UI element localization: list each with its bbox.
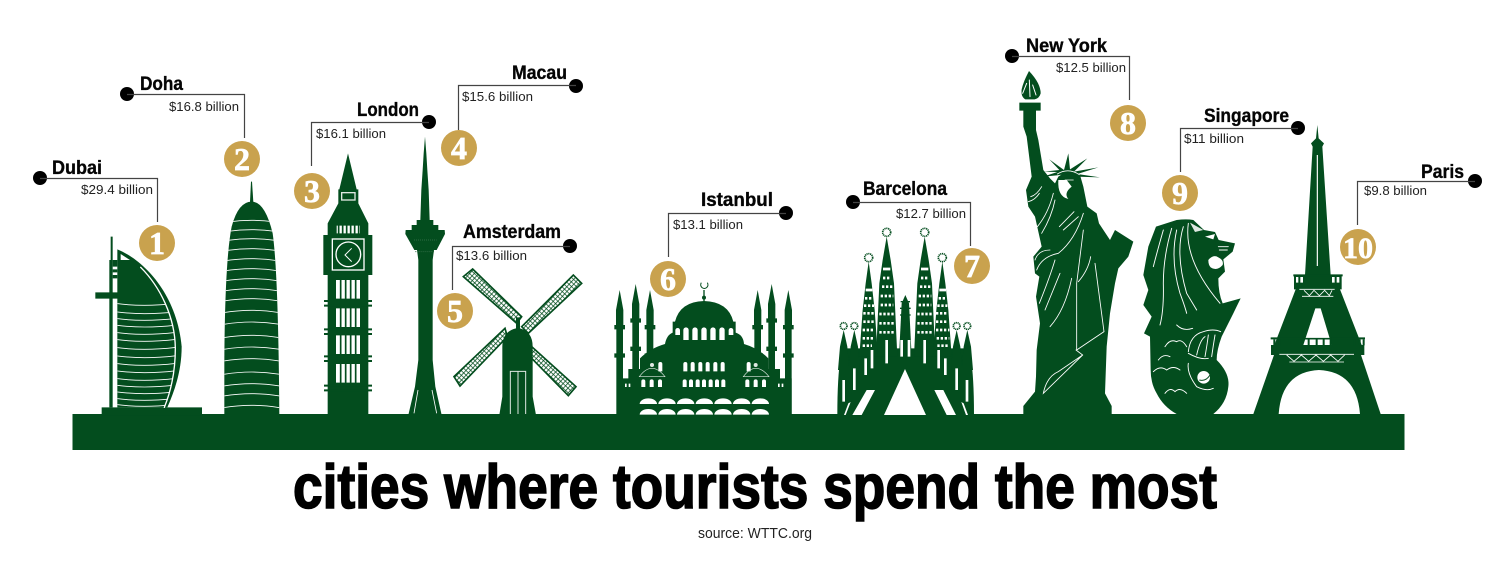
- callout: 10 Paris: [1340, 162, 1482, 265]
- callout: 5 Amsterdam: Amsterdam: [463, 222, 561, 243]
- callout: 2 Doha: $16.8 billion: [169, 99, 239, 114]
- landmark: Big Ben, London: [323, 153, 372, 415]
- callout: 4 Macau: Macau: [512, 63, 567, 84]
- callout: 4 Macau: $15.6 billion: [462, 89, 533, 104]
- landmark: Sagrada Familia, Barcelona: [837, 228, 974, 415]
- callout: 4 Macau: 4: [451, 130, 467, 166]
- callout: 7 Barcelona: 7: [964, 248, 980, 284]
- callout: 2 Doha: Doha: [140, 74, 183, 95]
- landmark: mosque, Istanbul: [614, 283, 794, 415]
- title: cities where tourists spend the most: [293, 453, 1217, 522]
- callout: 1 Dubai: 1: [149, 225, 165, 261]
- callout: 6 Istanbul: 6: [660, 261, 676, 297]
- callout: 2 Doha: [120, 74, 260, 177]
- callout: 3 London: London: [357, 100, 419, 121]
- callout: 7 Barcelona: [846, 179, 990, 284]
- callout: 9 Singapore: [1162, 106, 1305, 211]
- callout: 9 Singapore: Singapore: [1204, 106, 1289, 127]
- landmark: windmill, Amsterdam: [454, 269, 582, 415]
- callout: 3 London: [294, 100, 436, 209]
- callout: 10 Paris: $9.8 billion: [1364, 183, 1427, 198]
- callout: 7 Barcelona: Barcelona: [863, 179, 947, 200]
- callout: 9 Singapore: 9: [1172, 175, 1188, 211]
- callout: 8 New York: New York: [1026, 36, 1107, 57]
- callout: 1 Dubai: $29.4 billion: [81, 182, 153, 197]
- landmark: Macau Tower: [405, 137, 445, 415]
- callout: 3 London: $16.1 billion: [316, 126, 386, 141]
- landmark: Statue of Liberty, New York: [1019, 71, 1133, 414]
- callout: 8 New York: [1005, 36, 1146, 141]
- callout: 5 Amsterdam: [437, 222, 577, 329]
- callout: 7 Barcelona: $12.7 billion: [896, 206, 966, 221]
- callout: 6 Istanbul: $13.1 billion: [673, 217, 743, 232]
- source note: source: WTTC.org: [698, 525, 812, 542]
- callout: 1 Dubai: Dubai: [52, 158, 102, 179]
- callout: 6 Istanbul: [650, 190, 793, 297]
- callout: 10 Paris: Paris: [1421, 162, 1464, 183]
- callout: 5 Amsterdam: 5: [447, 293, 463, 329]
- landmark: Eiffel Tower, Paris: [1253, 125, 1381, 414]
- callout: 8 New York: 8: [1120, 105, 1136, 141]
- callout: 10 Paris: 10: [1343, 232, 1373, 265]
- callout: 3 London: 3: [304, 173, 320, 209]
- callout: 9 Singapore: $11 billion: [1184, 131, 1244, 146]
- landmark: Burj Doha tower: [224, 182, 280, 414]
- callout: 8 New York: $12.5 billion: [1056, 60, 1126, 75]
- landmark: Burj Al Arab, Dubai: [95, 237, 202, 415]
- landmark: Merlion, Singapore: [1143, 219, 1241, 414]
- callout: 4 Macau: [441, 63, 583, 166]
- ground band: [72, 414, 1404, 450]
- callout: 5 Amsterdam: $13.6 billion: [456, 248, 527, 263]
- callout: 2 Doha: 2: [234, 141, 250, 177]
- callout: 6 Istanbul: Istanbul: [701, 190, 773, 211]
- callout: 1 Dubai: [33, 158, 175, 261]
